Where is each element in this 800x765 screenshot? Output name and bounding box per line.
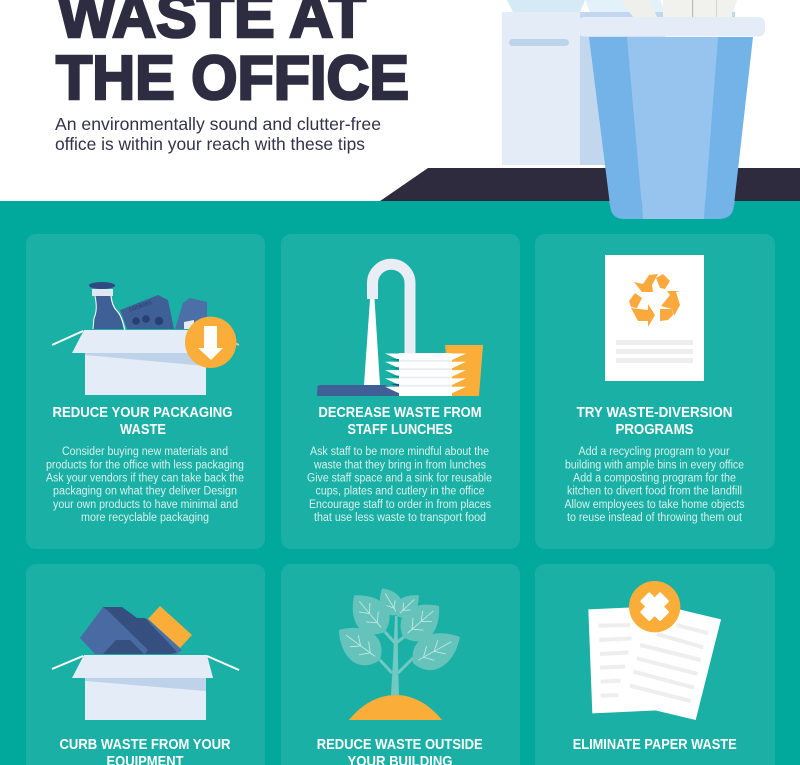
body text: Give staff space and a sink for reusable (307, 472, 492, 484)
icon: paper sheets with cross badge (588, 581, 721, 720)
teal background (0, 201, 800, 765)
heading (318, 405, 482, 438)
heading: REDUCE YOUR PACKAGING (52, 405, 232, 421)
panel: decrease waste from staff lunches (281, 234, 520, 549)
body text: Add a recycling program to your (578, 446, 730, 458)
body text: packaging on what they deliver Design (53, 486, 237, 498)
panel: curb waste from your equipment (26, 564, 265, 765)
body text: that use less waste to transport food (314, 512, 486, 524)
title: THE OFFICE (56, 44, 409, 113)
body text: products for the office with less packaging (46, 460, 244, 472)
body text: kitchen to divert food from the landfill (567, 486, 742, 498)
bin overlapping teal background (609, 201, 735, 219)
body text: Ask your vendors if they can take back the (46, 472, 244, 484)
heading: PROGRAMS (616, 422, 694, 438)
body text: building with ample bins in every office (565, 460, 744, 472)
heading (60, 737, 231, 765)
heading: DECREASE WASTE FROM (318, 405, 482, 421)
body text: cups, plates and cutlery in the office (316, 486, 484, 498)
heading (317, 737, 483, 765)
icon: box with bottle, cookies, milk and down arrow (52, 282, 239, 395)
heading: REDUCE WASTE OUTSIDE (317, 737, 483, 753)
icon: faucet, plates and cup (317, 264, 483, 396)
body text (46, 446, 244, 524)
body text (564, 446, 745, 524)
heading: TRY WASTE-DIVERSION (576, 405, 732, 421)
body text: Consider buying new materials and (62, 446, 228, 458)
heading: WASTE (120, 422, 166, 438)
title (56, 0, 409, 113)
illustration: waste bin (578, 0, 765, 219)
body text (307, 446, 492, 524)
body text: waste that they bring in from lunches (313, 460, 486, 472)
subtitle: office is within your reach with these tips (55, 134, 365, 154)
heading: CURB WASTE FROM YOUR (60, 737, 231, 753)
icon: plant on mound (329, 583, 468, 720)
body text: to reuse instead of throwing them out (567, 512, 743, 524)
body text: more recyclable packaging (81, 512, 209, 524)
icon: box with printer and paper (52, 606, 239, 720)
body text: Add a composting program for the (573, 472, 736, 484)
subtitle (55, 114, 381, 154)
heading (52, 405, 232, 438)
icon: box with bottle, cookies, milk and down arrow: cookies (128, 299, 153, 314)
body text: Encourage staff to order in from places (309, 499, 491, 511)
illustration: filing boxes and desk (380, 0, 800, 201)
heading: ELIMINATE PAPER WASTE (573, 737, 737, 753)
panel: reduce waste outside your building (281, 564, 520, 765)
subtitle: An environmentally sound and clutter-free (55, 114, 381, 134)
body text: Ask staff to be more mindful about the (310, 446, 489, 458)
body text: your own products to have minimal and (53, 499, 238, 511)
icon: document with recycling symbol (605, 255, 704, 381)
panel: try waste-diversion programs (535, 234, 775, 549)
body text: Allow employees to take home objects (564, 499, 745, 511)
heading: STAFF LUNCHES (348, 422, 453, 438)
panel: eliminate paper waste (535, 564, 775, 765)
panel: reduce your packaging waste (26, 234, 265, 549)
heading (576, 405, 732, 438)
